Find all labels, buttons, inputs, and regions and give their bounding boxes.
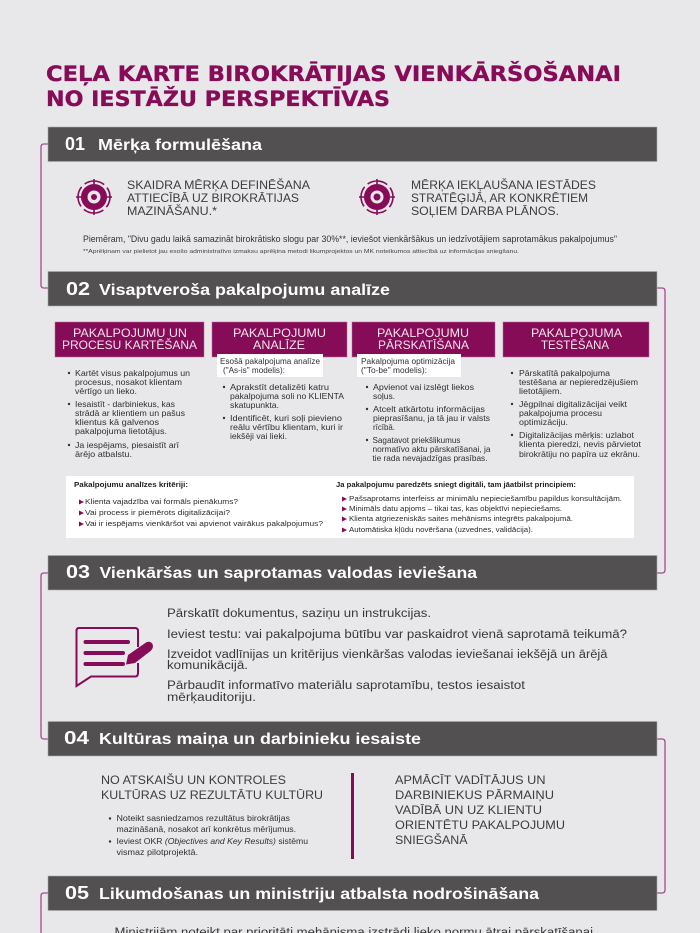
text: training: DARBINIEKUS PĀRMAIŅU [395, 790, 554, 802]
text: training: APMĀCĪT VADĪTĀJUS UN [395, 775, 546, 787]
text: plain language steps: Pārbaudīt informatīvo materiālu saprotamību, testos iesaistot [167, 680, 526, 692]
text: goal definition: ATTIECĪBĀ UZ BIROKRĀTIJAS [127, 193, 299, 205]
text: results culture: mazināšanā, nosakot arī konkrētus mērījumus. [116, 824, 296, 834]
text: results culture: NO ATSKAIŠU UN KONTROLES [101, 774, 286, 787]
connector: section 3 to 4 [41, 573, 48, 739]
list: testing: birokrātiju no papīra uz ekrānu. [519, 449, 640, 459]
text: results culture: KULTŪRAS UZ REZULTĀTU KULTŪRU [101, 790, 323, 802]
section 3 header [48, 556, 657, 590]
list: analysis: Aprakstīt detalizēti katru [230, 382, 329, 392]
list: mapping: strādā ar klientiem un pašus [75, 408, 185, 418]
panel: review header [352, 322, 495, 357]
label: as-is: ("As-is" modelis): [223, 365, 285, 375]
label: as-is: Esošā pakalpojuma analīze [220, 356, 320, 366]
list: mapping: klientus kā galvenos [75, 417, 159, 427]
list: review [366, 382, 491, 463]
text: training: SNIEGŠANĀ [395, 834, 468, 847]
section 3 header: Vienkāršas un saprotamas valodas ieviešana [100, 565, 477, 582]
panel: criteria: Minimāls datu apjoms – tikai tas, kas objektīvi nepieciešams. [349, 504, 562, 513]
panel: mapping header: PAKALPOJUMU UN [73, 328, 187, 340]
panel: analysis header: PAKALPOJUMU [233, 328, 326, 340]
panel: criteria: Pašsaprotams interfeiss ar minimālu nepieciešamību papildus konsultācijām. [349, 494, 622, 503]
list: testing: Pārskatītā pakalpojuma [519, 368, 610, 378]
list: analysis: iekšēji vai lieki. [230, 431, 287, 441]
list: mapping: Kartēt visus pakalpojumus un [75, 368, 190, 378]
panel: analysis header [212, 322, 347, 357]
list: testing: testēšana ar nepieredzējušiem [519, 377, 638, 387]
connector: section 2 to 3 [657, 288, 665, 573]
text: plain language steps: Izveidot vadlīnijas un kritērijus vienkāršas valodas ieviešanai iekšējā un ārējā [167, 649, 608, 661]
list: review: pieprasīšanu, ja tā jau ir valsts [373, 413, 490, 423]
icon: target left [76, 179, 112, 215]
text: results culture: vismaz pilotprojektā. [116, 847, 198, 857]
title: NO IESTĀŽU PERSPEKTĪVAS [46, 86, 390, 111]
list: review: Atcelt atkārtotu informācijas [373, 404, 485, 414]
label: to-be: ("To-be" modelis): [361, 365, 427, 375]
section 4 header [48, 722, 657, 756]
text: results culture: Ieviest OKR (Objectives and Key Results) sistēmu [116, 836, 308, 846]
icon: target right [359, 179, 395, 215]
list: mapping: procesus, nosakot klientam [75, 377, 182, 387]
text: goal in strategy: SOĻIEM DARBA PLĀNOS. [411, 206, 559, 218]
text: plain language steps: Pārskatīt dokumentus, saziņu un instrukcijas. [167, 608, 431, 620]
section 1 header: Mērķa formulēšana [98, 137, 262, 154]
panel: criteria: Vai process ir piemērots digitalizācijai? [85, 508, 230, 517]
panel: criteria [66, 476, 634, 538]
panel: testing header: TESTĒŠANA [541, 339, 609, 352]
list: review: Apvienot vai izslēgt liekos [373, 382, 474, 392]
list: mapping [68, 368, 190, 459]
connector: section 5 onward [41, 893, 48, 933]
list: testing: pakalpojuma procesu [519, 408, 602, 418]
text: goal in strategy: STRATĒĢIJĀ, AR KONKRĒTIEM [411, 193, 588, 205]
text: goal in strategy: MĒRĶA IEKĻAUŠANA IESTĀDES [411, 179, 596, 192]
panel: review header: PAKALPOJUMU [377, 328, 469, 340]
panel: analysis header: ANALĪZE [253, 340, 305, 352]
list: review: soļus. [373, 391, 395, 401]
section 2 header [48, 272, 657, 306]
list: mapping: Iesaistīt - darbiniekus, kas [75, 399, 175, 409]
title: CEĻA KARTE BIROKRĀTIJAS VIENKĀRŠOŠANAI [46, 61, 621, 86]
connector: section 1 to 2 [41, 144, 48, 288]
text: training: ORIENTĒTU PAKALPOJUMU [395, 820, 565, 832]
text: plain language steps [167, 608, 627, 704]
list: mapping: vērtīgo un lieko. [75, 386, 137, 396]
section 4 header: 04 [64, 728, 89, 748]
panel: criteria: Klienta atgriezeniskās saites mehānisms integrēts pakalpojumā. [349, 514, 573, 523]
text: plain language steps: mērķauditoriju. [167, 692, 256, 704]
list: analysis: Identificēt, kuri soļi pievieno [230, 413, 342, 423]
connector: section 4 to 5 [657, 739, 665, 893]
list: review: normatīvo aktu pārskatīšanai, ja [372, 444, 491, 454]
section 5 header: 05 [65, 883, 89, 903]
label: as-is [217, 354, 323, 377]
panel: criteria: Klienta vajadzība vai formāls pienākums? [85, 497, 238, 506]
text: training: VADĪBĀ UN UZ KLIENTU [395, 805, 542, 817]
panel: criteria: Vai ir iespējams vienkāršot vai apvienot vairākus pakalpojumus? [85, 519, 323, 528]
list: testing: klienta pieredzi, nevis pārvietot [519, 439, 642, 449]
panel: mapping header: PROCESU KARTĒŠANA [62, 339, 197, 352]
text: goal in strategy [411, 179, 596, 218]
list: analysis: skatupunkta. [230, 400, 279, 410]
section 5 header: Likumdošanas un ministriju atbalsta nodrošināšana [99, 886, 539, 903]
list: mapping: ārējo atbalstu. [75, 449, 132, 459]
list: testing [511, 368, 642, 459]
example text: Piemēram, "Divu gadu laikā samazināt birokrātisko slogu par 30%**, ieviešot vienkāršākus un iedzīvotājiem saprotamākus pakalpojumus" [83, 234, 617, 244]
list: mapping: Ja iespējams, piesaistīt arī [75, 440, 180, 450]
footnote: **Aprēķinam var pielietot jau esošo administratīvo izmaksu aprēķina metodi likumprojektos un MK noteikumos attiecībā uz informācijas sniegšanu. [83, 249, 519, 255]
title [46, 61, 621, 111]
list: analysis [223, 382, 344, 441]
list: analysis: pakalpojuma soli no KLIENTA [230, 391, 344, 401]
section 2 header: 02 [66, 279, 90, 299]
list: testing: optimizāciju. [519, 417, 568, 427]
panel: testing header: PAKALPOJUMA [531, 328, 622, 340]
panel: testing header [503, 322, 649, 357]
panel: criteria: Ja pakalpojumu paredzēts sniegt digitāli, tam jāatbilst principiem: [336, 480, 576, 489]
panel: criteria: Pakalpojumu analīzes kritēriji: [74, 480, 188, 489]
list: testing: lietotājiem. [519, 386, 562, 396]
list: testing: Jēgpilnai digitalizācijai veikt [519, 399, 628, 409]
text: results culture: Noteikt sasniedzamos rezultātus birokrātijas [116, 813, 290, 823]
section 5 header [48, 876, 657, 910]
section 1 header: 01 [65, 134, 85, 154]
panel: mapping header [55, 322, 204, 357]
section 3 header: 03 [66, 562, 90, 582]
list: testing: Digitalizācijas mērķis: uzlabot [519, 430, 635, 440]
list: review: Sagatavot priekšlikumus [372, 435, 460, 445]
panel: review header: PĀRSKATĪŠANA [378, 339, 469, 352]
label: to-be [357, 354, 461, 377]
icon: speech bubble with pen [76, 628, 153, 686]
label: to-be: Pakalpojuma optimizācija [361, 356, 455, 366]
list: review: rīcībā. [373, 422, 395, 432]
text: goal definition [127, 179, 310, 218]
text: goal definition: MAZINĀŠANU.* [127, 205, 218, 218]
text: goal definition: SKAIDRA MĒRĶA DEFINĒŠANA [127, 179, 310, 192]
text: plain language steps: Ieviest testu: vai pakalpojuma būtību var paskaidrot vienā saprotamā teikumā? [167, 629, 627, 641]
list: mapping: pakalpojuma lietotājus. [75, 426, 167, 436]
text: results culture [101, 774, 323, 857]
text: plain language steps: komunikācijā. [167, 660, 248, 672]
list: analysis: reālu vērtību klientam, kuri ir [230, 422, 343, 432]
panel: criteria: Automātiska kļūdu novēršana (uzvednes, validācija). [349, 525, 533, 534]
section 2 header: Visaptveroša pakalpojumu analīze [99, 282, 390, 299]
section 1 header [48, 127, 657, 162]
section 4 header: Kultūras maiņa un darbinieku iesaiste [99, 731, 421, 748]
text: training [395, 775, 565, 847]
list: review: tie rada nevajadzīgas prasības. [372, 453, 488, 463]
